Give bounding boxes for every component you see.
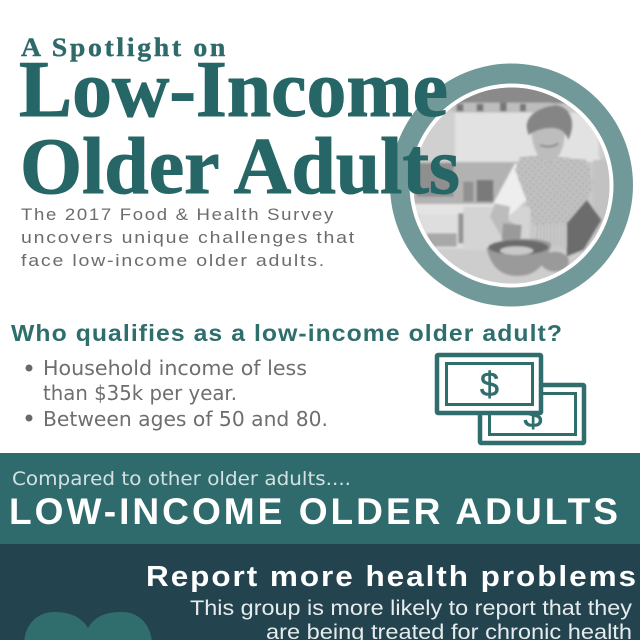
title line 2: Older Adults	[20, 123, 460, 211]
arm and hand	[490, 203, 514, 236]
panel body text: This group is more likely to report that they	[190, 597, 633, 620]
title: Low-Income Older Adults	[19, 46, 460, 211]
teal ring	[390, 64, 633, 306]
intro text block: uncovers unique challenges that	[21, 229, 356, 247]
panel: report more health problems	[0, 544, 640, 640]
bullet 1	[26, 364, 32, 372]
neck and face	[531, 127, 566, 160]
apron / dress	[514, 155, 592, 226]
icon: dollar bills	[437, 355, 584, 443]
white inner ring	[410, 84, 614, 288]
section heading: who qualifies: Who qualifies as a low-income older adult?	[11, 320, 563, 346]
intro text block	[21, 206, 356, 270]
bullet 2	[26, 414, 32, 422]
banner: comparison	[0, 453, 640, 544]
icon: dollar bills: $	[480, 366, 499, 404]
shelf	[458, 88, 566, 104]
banner heading: LOW-INCOME OLDER ADULTS	[9, 491, 621, 532]
mixing bowl	[487, 239, 552, 276]
intro text block: The 2017 Food & Health Survey	[21, 206, 335, 224]
intro text block: face low-income older adults.	[21, 252, 326, 270]
stove	[418, 214, 463, 249]
back bill	[480, 385, 584, 443]
right hand	[541, 252, 569, 272]
qualification bullet list: Between ages of 50 and 80.	[43, 407, 328, 431]
photo badge: woman cooking in kitchen	[390, 64, 633, 306]
table	[438, 250, 584, 284]
qualification bullet list: Household income of less	[43, 356, 307, 380]
wall and counter	[413, 162, 520, 205]
title line 1: Low-Income	[19, 46, 448, 134]
qualification bullet list	[26, 356, 328, 431]
front bill	[437, 355, 541, 413]
qualification bullet list: than $35k per year.	[43, 381, 237, 405]
panel heading: Report more health problems	[146, 561, 638, 593]
kitchen photo	[414, 88, 610, 284]
cabinets	[413, 112, 455, 165]
heading: A Spotlight on: A Spotlight on	[21, 33, 228, 62]
icon: heart	[24, 612, 152, 640]
banner intro: Compared to other older adults....	[12, 468, 351, 490]
icon: dollar bills: $	[524, 397, 543, 435]
hair	[527, 105, 572, 140]
white sleeve	[493, 163, 527, 217]
